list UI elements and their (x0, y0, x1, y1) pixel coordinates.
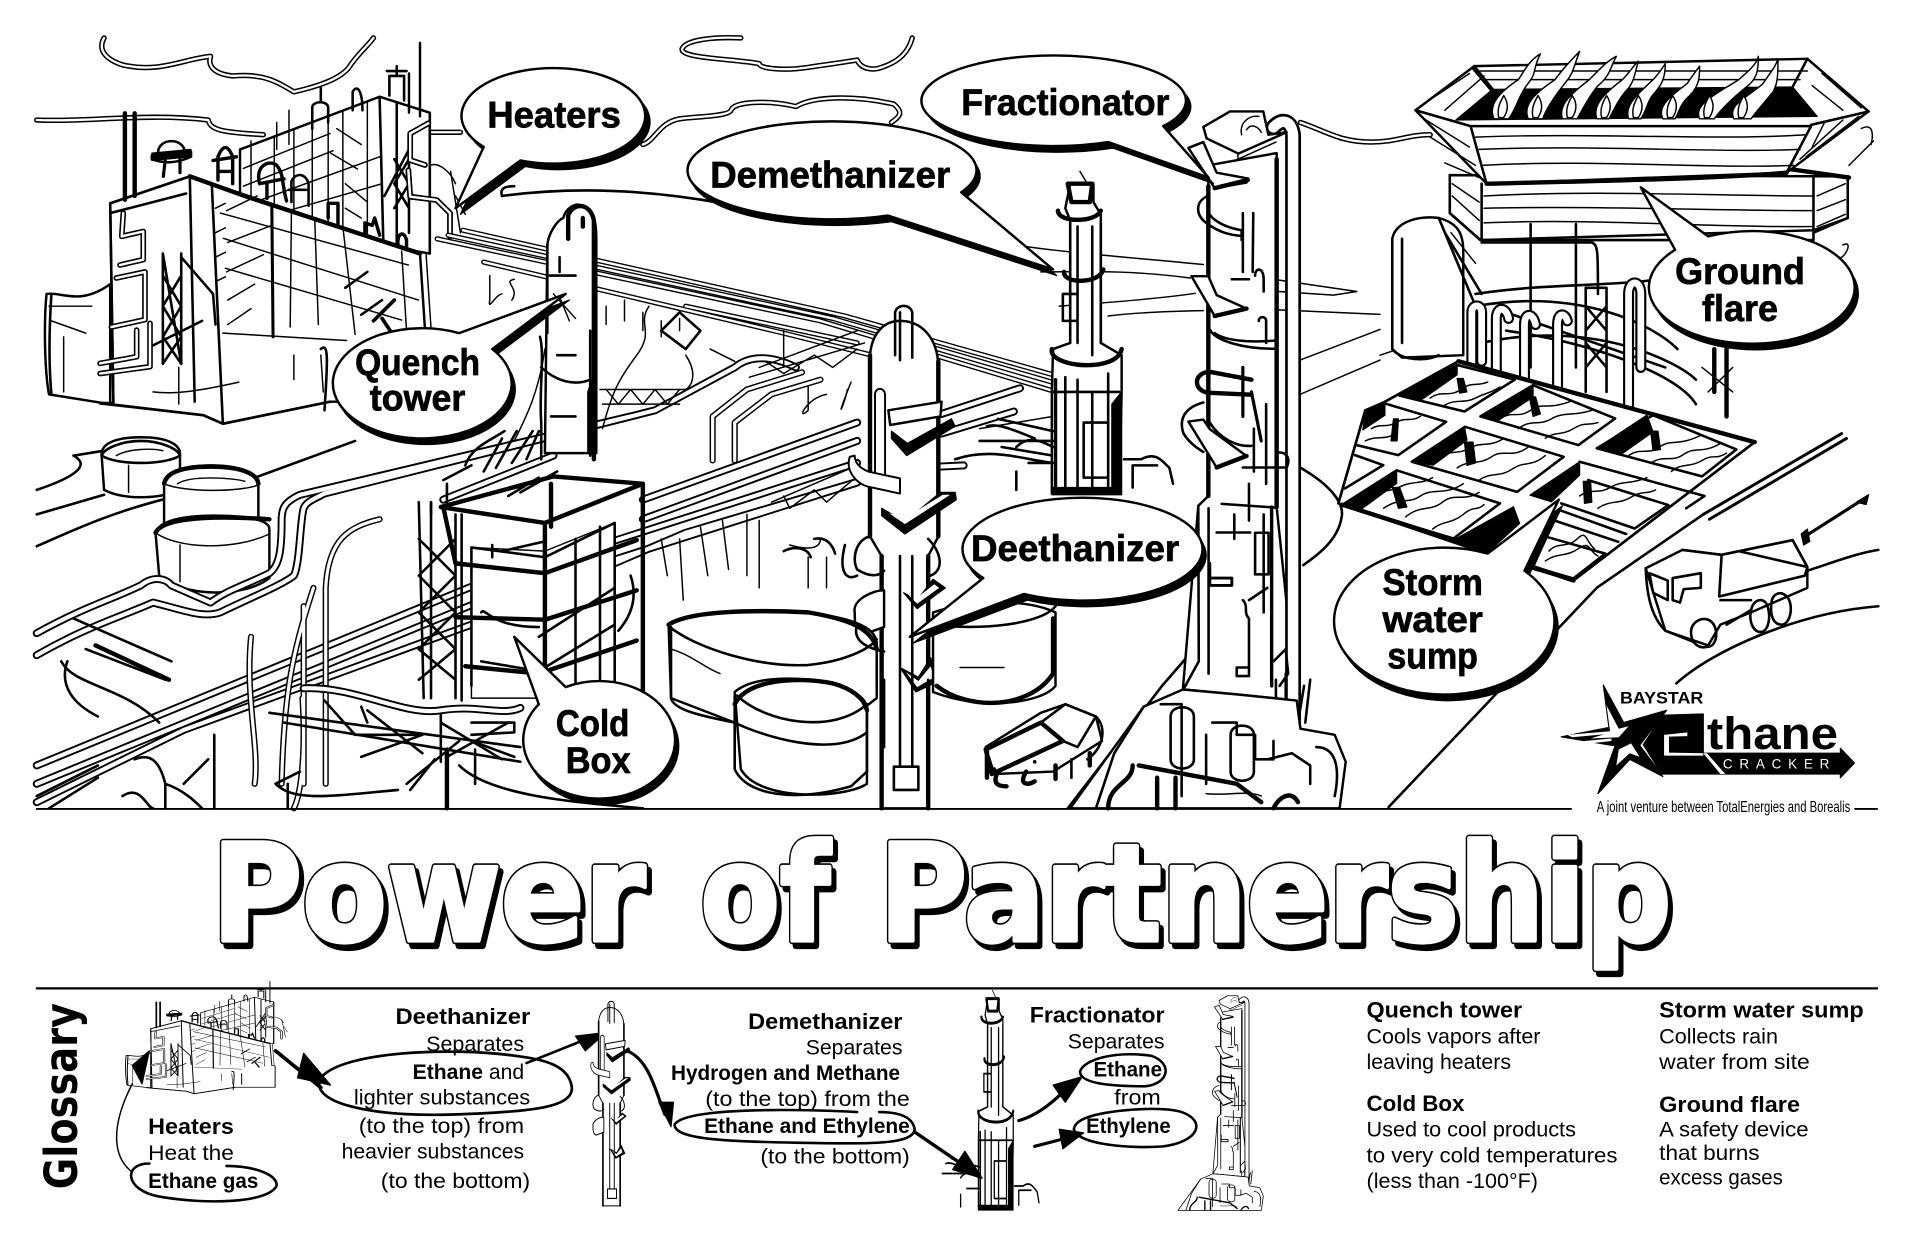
fractionator base platform (1070, 690, 1346, 808)
background arc (1182, 402, 1203, 452)
glossary: storm water sump and ground flare text: Collects rain (1659, 1024, 1778, 1048)
ground flare: hopper with flames (1416, 51, 1873, 258)
title: white fill layer: Partnership (879, 816, 1671, 973)
deethanizer lower flange over tanks (856, 625, 928, 808)
glossary: demethanizer text: Hydrogen and Methane (671, 1061, 900, 1085)
glossary: fractionator text (1030, 1003, 1196, 1147)
rule under scene (37, 808, 1877, 810)
bubble: Fractionator (921, 55, 1213, 184)
bubble: Quench tower: Quench (355, 342, 480, 383)
glossary icon: fractionator tower (1178, 996, 1263, 1210)
glossary: quench tower and cold box text: Used to cool products (1367, 1118, 1576, 1142)
glossary: fractionator text: Ethane (1093, 1058, 1162, 1082)
quench tower (514, 205, 596, 459)
glossary: demethanizer text (671, 1009, 915, 1168)
title: white fill layer: Power (212, 816, 646, 973)
glossary arrows: fractionator to products (1019, 1077, 1084, 1149)
glossary: storm water sump and ground flare text: Ground flare (1659, 1092, 1800, 1117)
heaters: rear block (240, 43, 430, 254)
bubble: Quench tower: tower (370, 377, 465, 418)
cold box (419, 431, 643, 757)
ground flare: lower drum (1450, 165, 1849, 240)
fractionator tower (1070, 111, 1346, 808)
deethanizer (centre) tower (849, 306, 956, 808)
glossary: heaters text: Heaters (148, 1114, 234, 1139)
tank centre large (669, 611, 877, 723)
glossary: fractionator text: Ethylene (1086, 1114, 1171, 1138)
glossary: demethanizer text: Ethane and Ethylene (704, 1114, 910, 1138)
title (212, 816, 1675, 977)
band and flanges (849, 402, 956, 790)
glossary: storm water sump and ground flare text (1658, 998, 1864, 1189)
flags and rings (1188, 142, 1310, 723)
big storage tanks (669, 602, 1056, 795)
flames (1492, 51, 1778, 119)
glossary rule (37, 987, 1877, 989)
glossary: quench tower and cold box text: to very cold temperatures (1367, 1143, 1618, 1167)
glossary: storm water sump and ground flare text: water from site (1658, 1050, 1810, 1074)
glossary: quench tower and cold box text: (less than -100°F) (1367, 1169, 1538, 1193)
glossary arrow: to mini tower (527, 1032, 606, 1063)
basin cells (1342, 365, 1736, 578)
glossary: deethanizer text (319, 1004, 572, 1193)
glossary icon: deethanizer tower (591, 1001, 631, 1206)
heaters complex (45, 43, 465, 424)
glossary: fractionator text: Separates (1068, 1029, 1164, 1053)
basin posts (1391, 378, 1660, 508)
bubble: Storm water sump: Storm (1382, 562, 1483, 603)
glossary: storm water sump and ground flare text: that burns (1659, 1141, 1760, 1165)
glossary: quench tower and cold box text: Cools vapors after (1367, 1024, 1540, 1048)
heaters: front chimneys (125, 113, 407, 250)
baystar wordmark: BAYSTAR (1620, 689, 1703, 708)
E block and arrow band (1643, 714, 1854, 778)
basin black walls (1342, 365, 1653, 554)
glossary: demethanizer text: (to the top) from the (705, 1087, 910, 1111)
bubble: Storm water sump: sump (1387, 636, 1478, 677)
bubble: Ground flare: flare (1702, 288, 1778, 329)
title: outline layer: Power (212, 816, 646, 973)
glossary: deethanizer text: Separates (426, 1032, 524, 1056)
bubble: Quench tower (333, 294, 569, 445)
glossary arrow: demethanizer to mini tower (916, 1133, 982, 1178)
bubble: Demethanizer (688, 121, 1057, 276)
storage tanks: left group (102, 437, 269, 592)
thane wordmark: thane (1707, 708, 1838, 759)
heaters: left annex (45, 284, 110, 404)
heaters: right bay pipes (100, 123, 450, 374)
title: shadow layer (216, 820, 1675, 977)
glossary: deethanizer text: (to the top) from (359, 1114, 524, 1138)
glossary: fractionator text: Fractionator (1030, 1003, 1165, 1028)
highlighted term: Ethane gas (148, 1169, 258, 1193)
glossary: demethanizer text: (to the bottom) (760, 1144, 910, 1168)
glossary: quench tower and cold box text: leaving heaters (1367, 1050, 1511, 1074)
bubble: Ground flare: Ground (1675, 251, 1805, 292)
glossary heading: Glossary (35, 1003, 88, 1189)
background sky and cloud lines (37, 38, 1430, 145)
title: shadow layer: of (704, 820, 835, 977)
tank 3 (156, 516, 269, 592)
cold box header pipes (431, 431, 557, 514)
title: shadow layer: Partnership (883, 820, 1675, 977)
glossary: deethanizer text: Ethane and (413, 1060, 524, 1084)
title: outline layer (212, 816, 1671, 973)
glossary: deethanizer text: (to the bottom) (381, 1169, 530, 1193)
roads (37, 434, 1878, 808)
storm water basins (1338, 361, 1755, 581)
bubble: Storm water sump: water (1381, 599, 1483, 640)
glossary: storm water sump and ground flare text: excess gases (1659, 1165, 1783, 1189)
glossary: fractionator text: from (1114, 1086, 1161, 1110)
tank front (735, 679, 867, 795)
baystar ethane cracker logo (1561, 685, 1854, 794)
glossary: demethanizer text: Demethanizer (748, 1009, 903, 1034)
bubble: Cold Box: Cold (556, 703, 629, 744)
bubble: Deethanizer (910, 498, 1206, 643)
chimneys on rear block (277, 66, 407, 149)
glossary: quench tower and cold box text (1367, 998, 1618, 1193)
bubble: Ground flare (1641, 187, 1858, 350)
dump truck (1646, 495, 1869, 647)
glossary: heaters text (117, 1051, 277, 1201)
title: white fill layer: of (700, 816, 831, 973)
ground flare: piping and vessel (1392, 217, 1733, 441)
bubble: Fractionator: Fractionator (961, 82, 1169, 123)
glossary: deethanizer text: heavier substances (342, 1140, 524, 1164)
glossary arrow: tower to demethanizer (627, 1051, 673, 1127)
glossary arrow: heaters to deethanizer (276, 1051, 331, 1088)
water ripples (1365, 382, 1727, 561)
side pipe (1273, 122, 1293, 723)
glossary icon: heaters (126, 981, 287, 1094)
title: outline layer: Partnership (879, 816, 1671, 973)
star (1561, 685, 1667, 794)
truss in front of cold box (269, 688, 643, 808)
tank behind deethanizer (933, 602, 1056, 703)
glossary icon: demethanizer tower (942, 990, 1039, 1210)
pipe racks (37, 230, 1060, 808)
bubble: Deethanizer: Deethanizer (971, 528, 1179, 569)
crown (1203, 111, 1287, 159)
bubble: Demethanizer: Demethanizer (710, 154, 950, 195)
title: outline layer: of (700, 816, 831, 973)
glossary: deethanizer text: lighter substances (354, 1086, 530, 1110)
pickup truck (986, 704, 1102, 786)
glossary: quench tower and cold box text: Cold Box (1367, 1091, 1465, 1116)
bubble: Storm water sump (1334, 500, 1562, 701)
heaters: left bay pipes overlay (100, 123, 450, 374)
tank 2 (164, 465, 258, 527)
cracker text: CRACKER (1723, 757, 1830, 772)
title: white fill layer (212, 816, 1671, 973)
glossary: heaters text: Heat the (148, 1141, 234, 1165)
title: shadow layer: Power (216, 820, 650, 977)
background ground contour lines (501, 186, 1398, 565)
heaters: front block (100, 176, 433, 424)
demethanizer tower (980, 171, 1173, 495)
bubble: Heaters: Heaters (487, 94, 621, 135)
bubble: Cold Box: Box (566, 740, 631, 781)
glossary: storm water sump and ground flare text: Storm water sump (1659, 998, 1864, 1023)
glossary: demethanizer text: Separates (806, 1035, 902, 1059)
glossary: deethanizer text: Deethanizer (396, 1004, 531, 1029)
tank 1 (102, 437, 180, 497)
glossary: quench tower and cold box text: Quench tower (1367, 998, 1522, 1023)
bubble: Heaters (456, 68, 650, 214)
glossary: storm water sump and ground flare text: A safety device (1659, 1118, 1809, 1142)
bubble: Cold Box (514, 637, 679, 805)
